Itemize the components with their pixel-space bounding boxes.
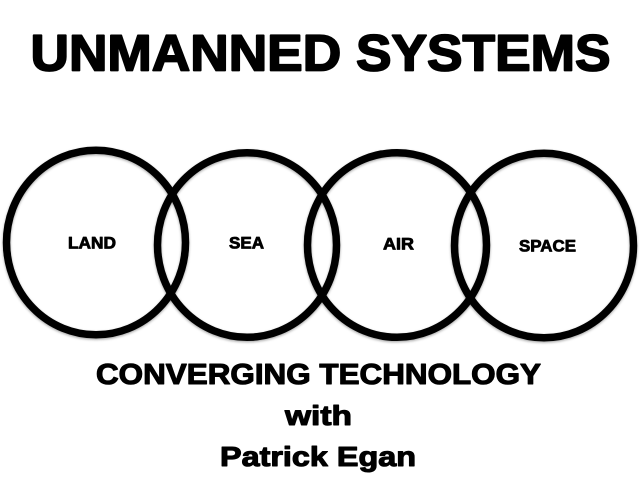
text: with: with (284, 400, 352, 431)
label: space: SPACE (519, 238, 576, 256)
circle: land (6, 150, 186, 335)
presenter name: Patrick Egan (220, 441, 416, 472)
circle: air (308, 153, 486, 337)
label: land: LAND (68, 234, 116, 252)
circle: space (454, 153, 634, 338)
subtitle: CONVERGING TECHNOLOGY (96, 359, 541, 391)
circle: sea (158, 153, 336, 337)
label: air: AIR (383, 236, 414, 254)
title: UNMANNED SYSTEMS (30, 24, 610, 82)
label: sea: SEA (229, 234, 264, 252)
diagram: four overlapping circles (6, 150, 634, 338)
